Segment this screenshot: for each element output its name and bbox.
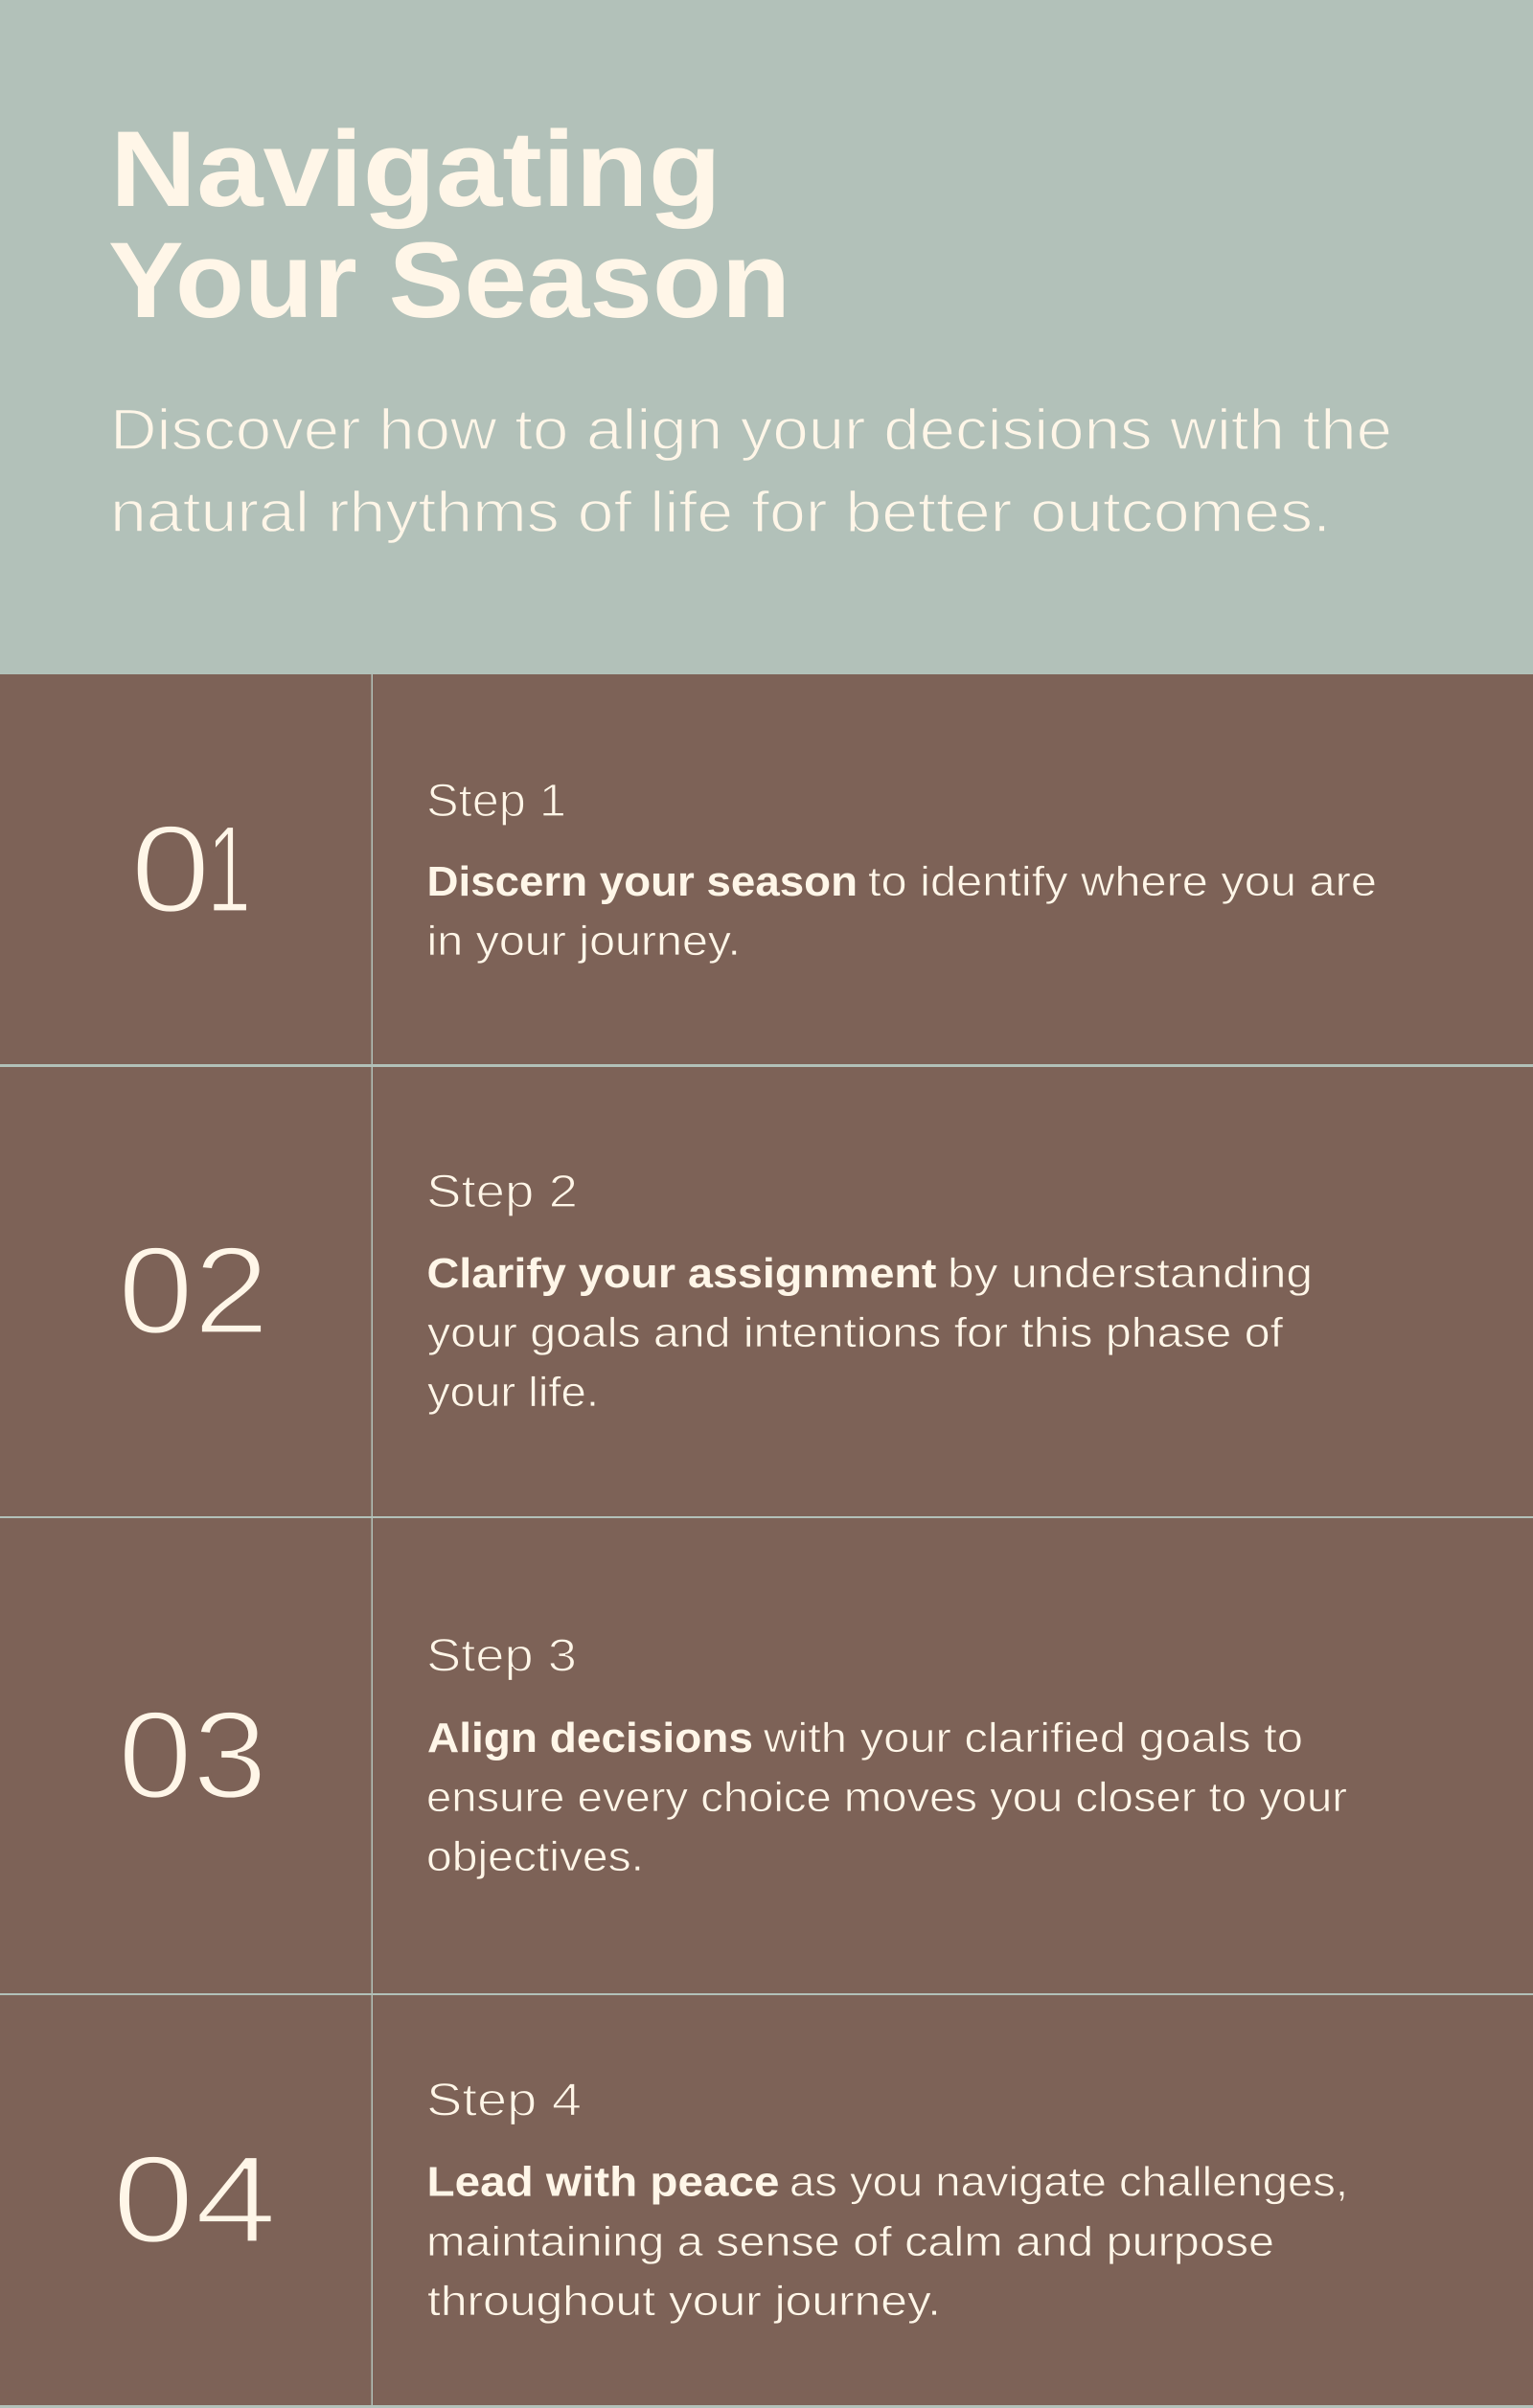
step 1 description: Discern your season	[427, 858, 858, 905]
step 1 description: to identify where you are	[868, 858, 1377, 905]
step 2 description: your goals and intentions for this phase of	[427, 1309, 1284, 1356]
step 3 label: Step 3	[426, 1630, 577, 1682]
step 2 description: Clarify your assignment	[427, 1250, 937, 1297]
step 1 description	[427, 858, 1377, 965]
step 3 description: Align decisions	[427, 1715, 753, 1761]
step 2 description: your life.	[427, 1369, 599, 1416]
step 3 description: objectives.	[426, 1833, 644, 1880]
step 3 description	[426, 1715, 1347, 1880]
step 4 description	[426, 2159, 1348, 2325]
title: Navigating	[110, 109, 721, 229]
step 4 description: Lead with peace	[427, 2159, 780, 2205]
step 1 description: in your journey.	[427, 918, 741, 965]
panel: step 4	[0, 1995, 1533, 2405]
panel: header	[0, 0, 1533, 674]
step 3 description: with your clarified goals to	[763, 1715, 1303, 1761]
step 4 description: throughout your journey.	[427, 2278, 941, 2325]
panel: step 1	[0, 674, 1533, 1065]
subtitle	[110, 398, 1392, 544]
step 4 description: maintaining a sense of calm and purpose	[426, 2218, 1274, 2265]
step 1 number: 1	[207, 799, 251, 939]
step 2 label: Step 2	[426, 1167, 578, 1217]
step 4 number: 04	[112, 2129, 277, 2269]
title	[108, 109, 790, 340]
step 2 description: by understanding	[948, 1250, 1313, 1297]
step 3 description: ensure every choice moves you closer to your	[426, 1774, 1347, 1821]
step 2 number: 02	[118, 1220, 269, 1360]
panel: step 2	[0, 1067, 1533, 1516]
subtitle: Discover how to align your decisions with the	[110, 398, 1392, 462]
step 1 number: 0	[130, 799, 211, 939]
subtitle: natural rhythms of life for better outcomes.	[110, 480, 1331, 544]
step 3 number: 03	[118, 1685, 267, 1825]
title: Your Season	[108, 220, 790, 340]
step 4 label: Step 4	[426, 2075, 582, 2126]
panel: step 3	[0, 1518, 1533, 1993]
step 2 description	[427, 1250, 1313, 1416]
step 4 description: as you navigate challenges,	[789, 2159, 1348, 2205]
step 1 label: Step 1	[426, 776, 566, 827]
